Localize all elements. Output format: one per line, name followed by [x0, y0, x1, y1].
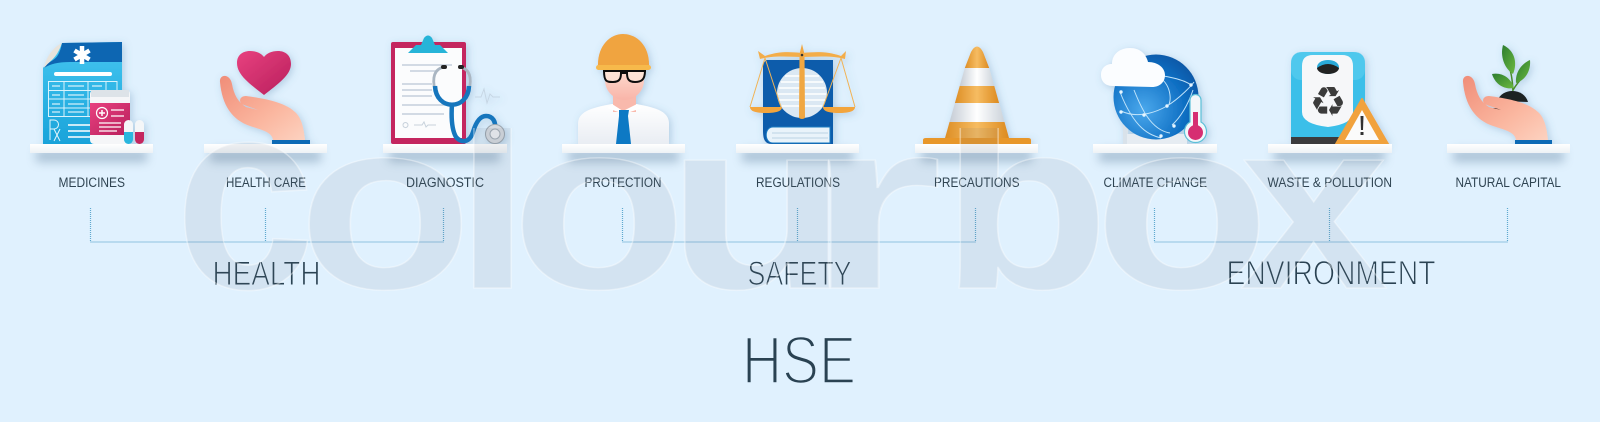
panel: medicines	[30, 42, 153, 191]
heading: health: HEALTH	[212, 255, 320, 293]
connector: safety bracket	[622, 208, 976, 242]
heading: environment: ENVIRONMENT	[1226, 254, 1436, 292]
connector: health bracket	[90, 208, 444, 242]
panel: climate change	[1093, 48, 1217, 191]
watermark: o	[1094, 70, 1270, 340]
label: PRECAUTIONS	[934, 175, 1020, 191]
heading: safety: SAFETY	[748, 255, 852, 293]
label: HEALTH CARE	[226, 175, 306, 191]
watermark: l	[455, 69, 530, 340]
panel: health care	[204, 51, 327, 191]
icon: recycling bin with warning sign: ♻	[1310, 78, 1346, 126]
icon: globe, cloud and thermometer	[1101, 48, 1206, 144]
icon: prescription and pill bottle	[43, 42, 144, 144]
label: REGULATIONS	[756, 175, 840, 191]
shelf	[1268, 144, 1392, 153]
label: DIAGNOSTIC	[406, 175, 484, 191]
panel: waste and pollution	[1268, 52, 1392, 191]
watermark: r	[806, 69, 943, 339]
shelf	[204, 144, 327, 153]
label: WASTE & POLLUTION	[1268, 175, 1392, 191]
panel: protection	[562, 34, 685, 191]
shelf	[915, 144, 1038, 153]
watermark: u	[666, 69, 849, 339]
label: PROTECTION	[584, 175, 662, 191]
watermark	[184, 128, 1387, 292]
panel: natural capital	[1447, 45, 1570, 191]
title: HSE	[742, 322, 856, 398]
icon: law book and scales	[750, 44, 855, 144]
shelf	[30, 144, 153, 153]
icon: traffic cone	[923, 46, 1031, 144]
label: CLIMATE CHANGE	[1104, 175, 1207, 191]
icon: engineer with hard hat	[578, 34, 669, 144]
shelf	[383, 144, 507, 153]
panel: precautions	[915, 46, 1038, 191]
watermark: x	[1240, 69, 1388, 339]
shelf	[1447, 144, 1570, 153]
label: MEDICINES	[58, 175, 125, 191]
panel: regulations	[736, 44, 859, 191]
watermark: o	[511, 70, 687, 340]
watermark: b	[941, 69, 1110, 339]
panel: diagnostic	[383, 36, 507, 191]
watermark: o	[298, 69, 472, 340]
shelf	[1093, 144, 1217, 153]
label: NATURAL CAPITAL	[1456, 175, 1561, 191]
connector: environment bracket	[1154, 208, 1508, 242]
shelf	[562, 144, 685, 153]
icon: hand holding heart	[220, 51, 310, 144]
icon: hand holding plant	[1463, 45, 1552, 144]
icon: clipboard and stethoscope	[391, 36, 504, 144]
shelf	[736, 144, 859, 153]
watermark: c	[175, 43, 315, 346]
